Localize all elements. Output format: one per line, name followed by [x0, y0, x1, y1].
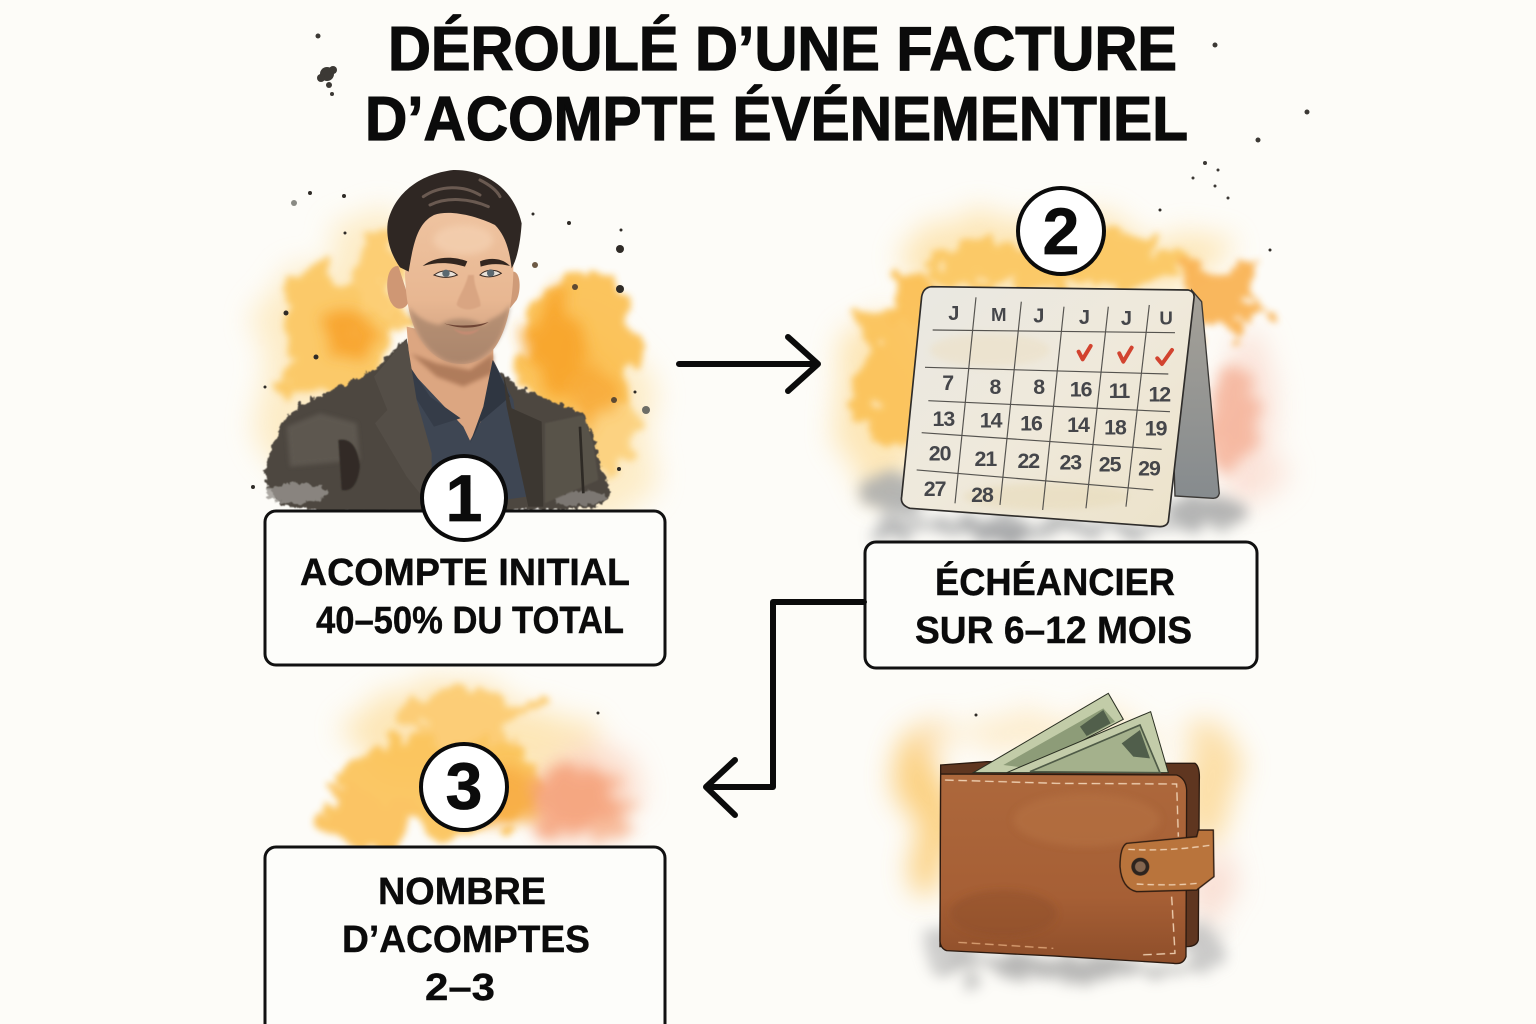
- calendar dates: [924, 371, 1170, 507]
- step 1 box: [265, 511, 665, 665]
- banknote front: [1007, 712, 1168, 773]
- ears: [387, 266, 409, 309]
- calendar dates: 28: [971, 483, 994, 507]
- stubble shade: [408, 303, 511, 363]
- eyes: [434, 269, 501, 277]
- step 2 box: SUR 6–12 MOIS: [915, 610, 1192, 652]
- watercolor wash: step 1: [250, 210, 655, 515]
- calendar dates: 11: [1109, 379, 1130, 403]
- step 3 box: D’ACOMPTES: [342, 919, 590, 961]
- wallet back: [940, 762, 1199, 947]
- eyebrows: [423, 258, 510, 267]
- step 2 box: ÉCHÉANCIER: [935, 560, 1175, 604]
- calendar dates: 13: [932, 407, 955, 431]
- calendar dates: 27: [924, 477, 946, 501]
- calendar red check marks: [1079, 346, 1172, 364]
- lapel right: [503, 373, 543, 507]
- calendar dates: 19: [1145, 416, 1168, 440]
- calendar dates: 16: [1020, 412, 1043, 436]
- illustration: man in dark blazer: [263, 170, 610, 513]
- calendar dates: 7: [942, 371, 953, 395]
- paint speckles around illustrations: [251, 191, 1272, 716]
- step 1 box: 40–50% DU TOTAL: [316, 600, 624, 642]
- calendar weekday letters: J: [1079, 307, 1089, 329]
- step 3 box: NOMBRE: [378, 871, 546, 913]
- calendar stand: [1173, 290, 1219, 498]
- wallet front: [940, 774, 1187, 964]
- hair: [387, 170, 522, 272]
- calendar page blotches: [930, 333, 1130, 510]
- arrow: step 2 to step 3: [706, 602, 864, 815]
- calendar page: [901, 287, 1194, 527]
- calendar dates: 22: [1017, 449, 1039, 473]
- calendar dates: 29: [1138, 456, 1161, 480]
- step 2 box: [865, 542, 1257, 668]
- illustration: desk calendar: [901, 287, 1219, 527]
- calendar weekday letters: M: [991, 304, 1006, 325]
- calendar dates: 16: [1070, 378, 1093, 402]
- arrow: step 1 to step 2: [679, 337, 818, 391]
- ink splatter around title: [316, 34, 1310, 200]
- step number 1: [422, 456, 506, 540]
- calendar dates: 23: [1059, 450, 1082, 474]
- mouth: [444, 322, 489, 328]
- watercolor wash: step 3: [320, 689, 645, 848]
- calendar weekday letters: J: [1121, 308, 1131, 330]
- jacket: [263, 338, 610, 513]
- step 3 box: [265, 847, 665, 1024]
- chin shadow: [411, 353, 493, 387]
- hair highlights: [423, 180, 500, 207]
- calendar dates: 12: [1148, 382, 1170, 406]
- calendar dates: 21: [974, 447, 997, 471]
- calendar weekday letters: [948, 303, 1172, 330]
- calendar weekday letters: J: [1033, 305, 1043, 327]
- calendar dates: 8: [1033, 375, 1045, 399]
- collar right: [470, 360, 510, 443]
- step number 2: 2: [1043, 194, 1079, 268]
- step 1 box: ACOMPTE INITIAL: [300, 552, 630, 594]
- face: [405, 203, 513, 364]
- cheek and forehead highlight: [433, 225, 493, 255]
- step number 2: [1018, 188, 1104, 274]
- banknote back: [973, 693, 1123, 773]
- step number 3: [421, 744, 507, 830]
- watercolor wash: wallet: [897, 717, 1236, 979]
- calendar weekday letters: U: [1159, 307, 1172, 328]
- watercolor wash: step 2: [835, 220, 1280, 537]
- collar left: [403, 357, 461, 427]
- jacket shading: [267, 413, 607, 506]
- wallet stitching: [945, 780, 1178, 955]
- title: D’ACOMPTE ÉVÉNEMENTIEL: [365, 85, 1188, 154]
- step number 1: 1: [446, 461, 482, 535]
- step 3 box: 2–3: [425, 967, 495, 1009]
- step number 3: 3: [446, 749, 482, 823]
- calendar dates: 14: [1067, 413, 1090, 437]
- calendar grid: [917, 297, 1175, 510]
- lapel left: [374, 338, 432, 508]
- calendar weekday letters: J: [948, 303, 958, 325]
- calendar dates: 14: [980, 408, 1003, 432]
- wallet clasp strap: [1120, 830, 1214, 892]
- calendar dates: 20: [929, 442, 951, 466]
- leather blotches: [950, 793, 1160, 937]
- illustration: leather wallet with banknotes: [940, 693, 1214, 964]
- nose: [457, 275, 481, 309]
- calendar dates: 8: [990, 375, 1002, 399]
- neck: [407, 327, 493, 441]
- title: DÉROULÉ D’UNE FACTURE: [388, 15, 1177, 84]
- title: [365, 15, 1188, 154]
- calendar dates: 18: [1104, 416, 1127, 440]
- shirt: [403, 355, 527, 510]
- calendar dates: 25: [1099, 452, 1122, 476]
